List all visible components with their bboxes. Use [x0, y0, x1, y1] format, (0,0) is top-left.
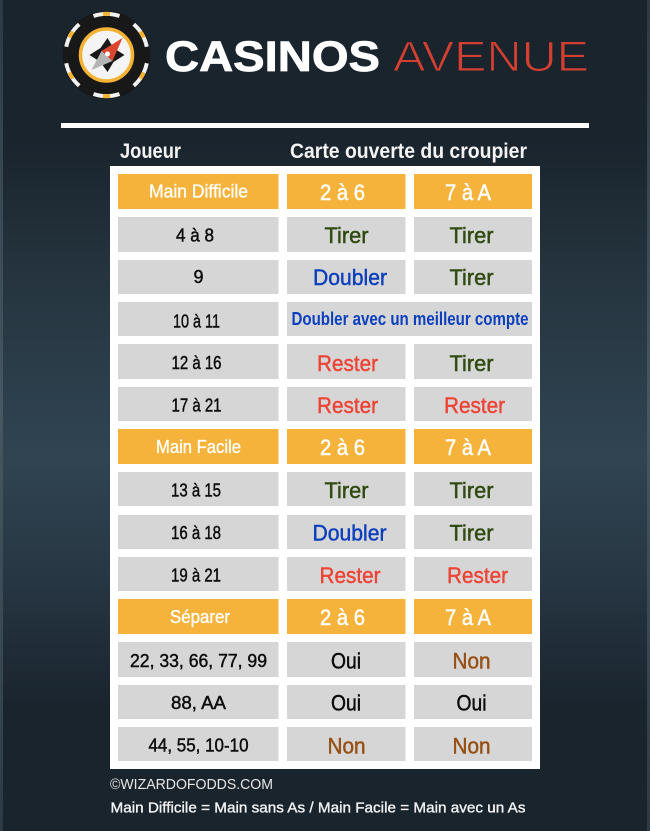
header row: Main Difficile: Main Difficile [149, 182, 248, 202]
logo: casino chip compass [62, 11, 150, 99]
header row: Main Facile: 2 à 6 [320, 435, 365, 460]
row: 16 à 18 [118, 515, 532, 549]
row: 17 à 21: 17 à 21 [172, 395, 222, 416]
row: 13 à 15: Tirer [324, 478, 368, 503]
header row: Main Difficile: 7 à A [445, 180, 491, 205]
row: 19 à 21: Rester [447, 563, 508, 588]
header row: Main Difficile: 2 à 6 [320, 180, 365, 205]
row: 16 à 18: Tirer [450, 521, 494, 546]
row: 4 à 8: 4 à 8 [176, 225, 214, 246]
row: 22, 33, 66, 77, 99: 22, 33, 66, 77, 99 [130, 650, 267, 671]
row: 9: Tirer [450, 265, 494, 290]
row: 22, 33, 66, 77, 99: Non [452, 649, 490, 674]
row: 44, 55, 10-10: 44, 55, 10-10 [148, 735, 248, 756]
column heading: Joueur: Joueur [120, 139, 182, 163]
row: 12 à 16: Tirer [450, 351, 494, 376]
row: 88, AA [118, 685, 532, 719]
header row: Main Facile: Main Facile [156, 437, 241, 457]
row: 17 à 21 [118, 387, 532, 421]
header row: Séparer: 2 à 6 [320, 605, 365, 630]
row: 13 à 15 [118, 472, 532, 506]
header row: Main Difficile [118, 174, 532, 209]
row: 4 à 8: Tirer [450, 223, 494, 248]
header row: Séparer: 7 à A [445, 605, 491, 630]
title: Casinos Avenue [165, 33, 589, 81]
title: Casinos Avenue: AVENUE [393, 33, 589, 81]
row: 44, 55, 10-10: Non [452, 733, 490, 758]
row: 13 à 15: Tirer [450, 478, 494, 503]
source credit: ©WIZARDOFODDS.COM [110, 776, 273, 793]
row: 44, 55, 10-10 [118, 727, 532, 761]
row: 10 à 11: Doubler avec un meilleur compte [292, 309, 528, 329]
row: 44, 55, 10-10: Non [328, 733, 366, 758]
row: 88, AA: 88, AA [171, 692, 227, 713]
row: 10 à 11: 10 à 11 [173, 311, 220, 332]
row: 88, AA: Oui [456, 691, 486, 716]
title: Casinos Avenue: CASINOS [165, 33, 380, 81]
header row: Main Facile: 7 à A [445, 435, 491, 460]
row: 19 à 21: 19 à 21 [171, 565, 221, 586]
row: 12 à 16 [118, 344, 532, 379]
row: 9: 9 [194, 266, 204, 287]
header row: Main Facile [118, 429, 532, 464]
header row: Séparer: Séparer [170, 607, 230, 627]
row: 16 à 18: Doubler [312, 521, 386, 546]
row: 17 à 21: Rester [444, 393, 505, 418]
row: 9 [118, 260, 532, 294]
row: 22, 33, 66, 77, 99 [118, 642, 532, 677]
row: 22, 33, 66, 77, 99: Oui [331, 649, 361, 674]
row: 19 à 21 [118, 557, 532, 591]
row: 16 à 18: 16 à 18 [171, 522, 221, 543]
row: 12 à 16: 12 à 16 [172, 352, 222, 373]
row: 10 à 11 [118, 302, 532, 336]
footnote: Main Difficile = Main sans As / Main Facile = Main avec un As [110, 800, 526, 817]
row: 4 à 8: Tirer [324, 223, 368, 248]
row: 4 à 8 [118, 217, 532, 252]
column heading: Carte ouverte du croupier: Carte ouverte du croupier [290, 139, 528, 163]
header row: Séparer [118, 599, 532, 634]
row: 12 à 16: Rester [317, 351, 378, 376]
row: 19 à 21: Rester [320, 563, 380, 588]
panel: strategy table [110, 166, 540, 769]
row: 88, AA: Oui [331, 691, 361, 716]
row: 17 à 21: Rester [317, 393, 378, 418]
row: 9: Doubler [313, 265, 387, 290]
row: 13 à 15: 13 à 15 [171, 480, 221, 501]
